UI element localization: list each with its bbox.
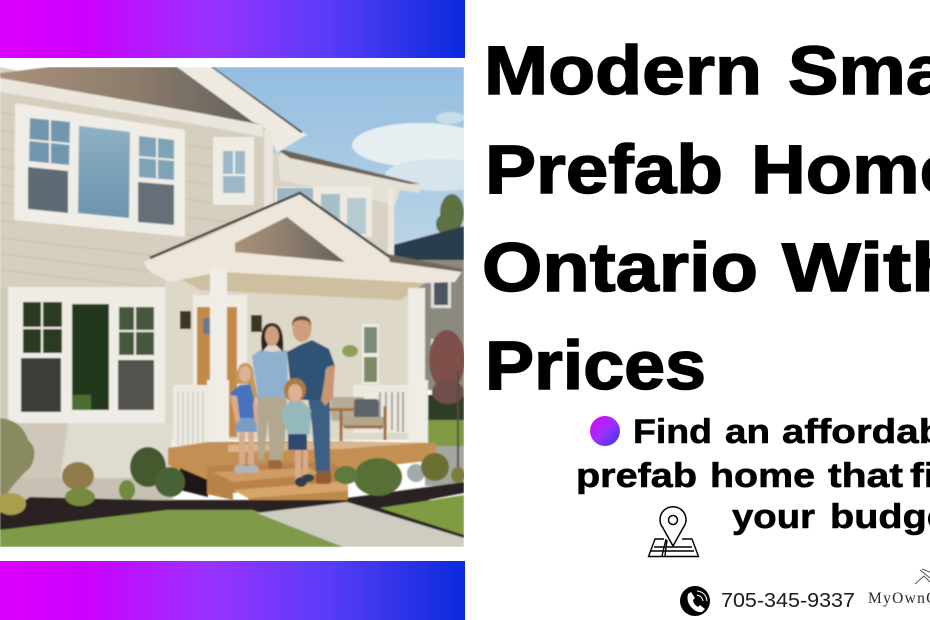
title: Prefab xyxy=(485,131,723,208)
icon: gradient bullet xyxy=(590,416,620,446)
lower triple window xyxy=(8,287,165,423)
father xyxy=(287,316,335,484)
shrubs and plants xyxy=(0,418,465,515)
red maple tree xyxy=(429,330,465,480)
upper small window xyxy=(213,137,254,205)
daughter xyxy=(230,363,259,474)
family xyxy=(230,316,335,487)
top gradient bar xyxy=(0,0,465,58)
hanging plant and shuttered window xyxy=(342,324,379,384)
subtitle: home xyxy=(710,457,815,495)
subtitle xyxy=(576,413,930,536)
title: With xyxy=(782,229,930,306)
title: Modern xyxy=(484,32,762,109)
subtitle: an xyxy=(725,413,770,451)
porch wall xyxy=(165,275,410,440)
porch chair xyxy=(327,397,385,442)
neighbouring house xyxy=(393,226,464,390)
icon: phone xyxy=(680,586,710,616)
lower wall and foundation xyxy=(7,423,174,502)
subtitle: Find xyxy=(633,413,712,451)
title: Prices xyxy=(485,327,706,404)
subtitle: that xyxy=(828,457,904,495)
porch columns xyxy=(207,268,428,457)
house photo xyxy=(0,67,495,547)
porch railings xyxy=(173,385,409,447)
logo mark xyxy=(915,569,930,584)
background tree xyxy=(436,194,464,233)
phone number: 705-345-9337 xyxy=(721,590,855,612)
second storey wing xyxy=(272,149,422,256)
front door and lamps xyxy=(180,295,262,437)
bottom gradient bar xyxy=(0,561,465,620)
subtitle: prefab xyxy=(576,457,697,495)
soffit shadow xyxy=(182,272,426,300)
mother xyxy=(252,323,288,469)
background greenery and lawn xyxy=(424,394,464,487)
son xyxy=(280,378,314,487)
main wall siding xyxy=(0,67,308,288)
porch gable roof xyxy=(143,193,463,283)
title: Ontario xyxy=(482,229,758,306)
wooden deck and steps xyxy=(167,440,437,502)
upper triple window xyxy=(14,103,185,237)
subtitle: your xyxy=(732,498,815,536)
logo xyxy=(868,569,930,607)
ground: mulch, lawn and path xyxy=(0,482,464,547)
sky with clouds xyxy=(213,67,464,246)
icon: map pin xyxy=(648,507,698,556)
title xyxy=(482,32,930,404)
